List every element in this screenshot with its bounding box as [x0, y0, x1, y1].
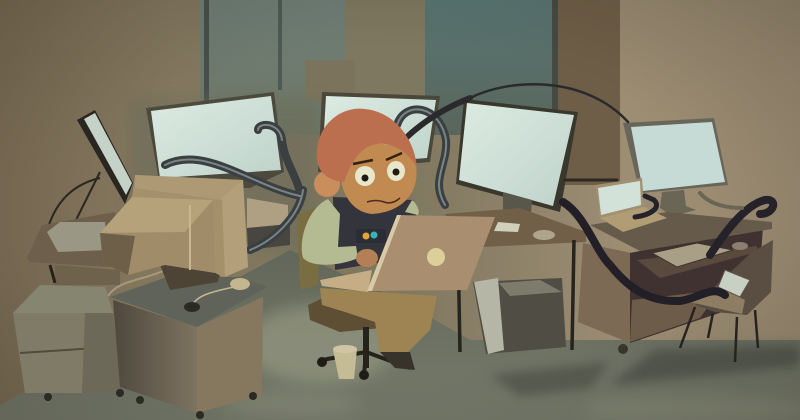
arm left	[302, 199, 358, 265]
arm right	[405, 200, 419, 215]
laptop: front	[320, 215, 495, 292]
monitor: far left	[48, 110, 133, 228]
monitor: large center right	[456, 99, 578, 226]
office chair	[297, 206, 412, 380]
laptop: small on right desk	[595, 178, 667, 232]
shirt logo	[356, 229, 386, 243]
old CRT monitor	[100, 175, 248, 290]
programmer	[302, 109, 437, 370]
monitor: back center	[318, 92, 440, 172]
torso	[333, 197, 420, 270]
shoes	[380, 352, 415, 370]
hair	[317, 109, 417, 182]
monitor: right	[623, 118, 728, 216]
file cabinet: far left	[13, 285, 124, 401]
computer tower	[473, 278, 566, 354]
desk: left	[27, 212, 125, 285]
hands	[356, 249, 378, 267]
head	[340, 144, 417, 214]
legs	[320, 288, 437, 352]
chair: right with tablet	[680, 240, 773, 362]
eyes	[355, 166, 375, 186]
pedestal under old CRT	[108, 270, 267, 419]
desk: center	[445, 208, 586, 352]
desk: right	[578, 212, 772, 354]
monitor: back left	[146, 92, 290, 250]
ears	[314, 171, 340, 197]
mouth	[367, 198, 400, 203]
coffee cup	[333, 345, 357, 379]
cables	[165, 84, 773, 301]
